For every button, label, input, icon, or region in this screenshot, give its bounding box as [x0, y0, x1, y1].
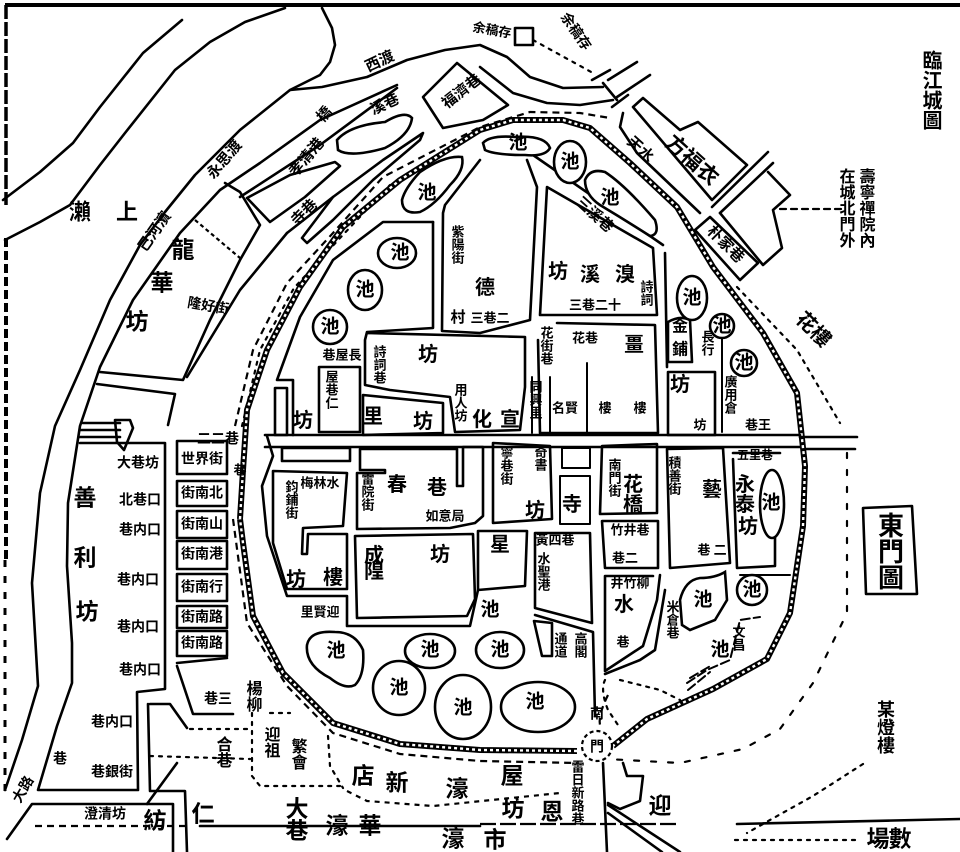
southwest labels: 合巷 — [214, 735, 232, 768]
inner street blocks, south — [262, 436, 790, 728]
inner ward labels — [286, 259, 758, 616]
inner ward labels: 寺 — [562, 493, 582, 516]
Shanli ward label: 坊 — [76, 600, 98, 624]
Shanli ward label: 利 — [74, 546, 96, 570]
pond labels: 池 — [682, 286, 702, 308]
west river label: 上 — [116, 200, 138, 224]
title: city map: 臨江城圖 — [919, 50, 942, 130]
inner ward labels: 坊 — [525, 498, 545, 522]
small street names, south: 鈞鋪街 — [284, 479, 298, 519]
pond: long east — [760, 470, 784, 538]
bottom street labels: 濠 — [446, 776, 468, 802]
rotated labels on the north canals: 隆好街 — [186, 294, 230, 318]
pond: east 1 — [677, 276, 707, 320]
west column street names: 世界街 — [181, 450, 223, 468]
west column street names: 巷内口 — [117, 618, 159, 636]
northeast labels: 天水 — [623, 133, 657, 166]
Longhua ward label: 華 — [150, 270, 174, 296]
inner ward labels: 畺 — [624, 334, 644, 356]
rotated labels on the north canals — [134, 9, 617, 318]
rotated labels on the north canals: 三溪巷 — [572, 193, 617, 236]
pond labels: 池 — [480, 598, 500, 620]
pond labels — [320, 132, 781, 718]
west column street names: 巷内口 — [91, 714, 133, 730]
inner ward labels: 水 — [614, 593, 634, 616]
inner ward labels: 樓 — [323, 566, 343, 589]
Longhua ward block — [97, 183, 287, 425]
west column street names: 大路 — [9, 773, 37, 806]
small street names, north: 樓 — [633, 400, 647, 416]
northwest canal strips — [247, 133, 423, 243]
west column street names: 二二巷 — [197, 432, 239, 448]
city wall — [240, 120, 805, 751]
west column street names: 北巷口 — [119, 492, 161, 508]
bottom street labels: 濠 — [326, 814, 348, 838]
north diamond block — [423, 63, 508, 128]
inner ward labels: 星 — [490, 534, 510, 556]
inner ward labels: 坊 — [548, 259, 568, 283]
west column street names: 巷三 — [204, 692, 232, 708]
small street names, south: 井竹柳 — [610, 576, 650, 590]
pond labels: 池 — [417, 182, 437, 204]
Longhua ward label — [126, 238, 194, 334]
west column street names: 巷 — [53, 752, 67, 768]
inner ward labels: 坊 — [293, 408, 313, 432]
small street names, south: 巷 二 — [697, 542, 727, 558]
northeast gate road and bridge — [592, 62, 790, 280]
small street names, north: 三巷二 — [470, 310, 510, 326]
pond labels: 池 — [525, 690, 545, 712]
small street names, south: 水聖港 — [536, 551, 550, 591]
bottom street labels: 恩 — [540, 800, 564, 824]
Longhua ward label: 坊 — [126, 310, 148, 334]
pond: north — [483, 137, 550, 155]
pond: southeast circle — [737, 575, 767, 605]
inner ward labels: 溪 — [580, 263, 600, 286]
pond labels: 池 — [355, 278, 375, 300]
west column street names: 巷内口 — [119, 522, 161, 538]
rotated labels on the north canals: 寺巷 — [288, 196, 321, 229]
southwest labels: 南 — [590, 706, 604, 722]
west column street names: 巷内口 — [119, 662, 161, 678]
northeast labels: 在城北門外 — [836, 167, 856, 248]
bottom street labels — [144, 764, 912, 852]
pond: south 6 — [501, 682, 575, 732]
small street names, north: 花巷 — [572, 330, 598, 346]
north gate box — [515, 28, 533, 45]
small street names, north: 廣用倉 — [722, 374, 738, 415]
southwest labels: 迎祖 — [262, 726, 280, 759]
small street names, south: 里賢迎 — [300, 604, 340, 620]
inner ward labels: 里 — [363, 406, 383, 428]
inner street blocks, north — [275, 155, 722, 435]
small street names, south: 寧巷街 — [498, 445, 514, 485]
pond: southeast irregular — [680, 572, 727, 630]
small street names, north: 長行 — [700, 330, 714, 357]
pond labels: 池 — [560, 150, 580, 172]
northeast labels: 花樓 — [791, 307, 836, 352]
pond: south 5 — [476, 632, 524, 668]
bottom street labels: 店 — [352, 764, 374, 788]
rotated labels on the north canals: 余稿存 — [471, 19, 513, 41]
inner ward labels: 永 — [735, 473, 755, 496]
pond: south 1 — [307, 632, 363, 686]
pond: wall-side — [402, 157, 462, 212]
pond labels: 池 — [600, 186, 620, 208]
small street names, south: 黃四巷 — [535, 532, 575, 548]
bottom street labels: 華 — [358, 814, 382, 838]
pond labels: 池 — [390, 242, 410, 264]
rotated labels on the north canals: 孝清港 — [285, 134, 328, 180]
small street names, north: 巷屋長 — [322, 348, 362, 362]
small street names, south: 積善街 — [666, 455, 682, 495]
inner ward labels: 春 — [387, 473, 407, 496]
west column street names: 街南山 — [181, 516, 223, 532]
inner ward labels: 德 — [475, 276, 495, 299]
inner ward labels: 巷 — [427, 476, 447, 499]
bottom street labels: 仁 — [192, 802, 214, 826]
rotated labels on the north canals: 永思渡 — [203, 136, 246, 182]
main east-west street — [265, 435, 857, 449]
west column street names: 街南北 — [181, 484, 223, 502]
bottom street labels: 巷 — [286, 818, 308, 844]
ponds — [307, 115, 784, 739]
pond labels: 池 — [508, 132, 528, 154]
west column street names: 街南港 — [181, 546, 223, 562]
northeast labels — [623, 130, 895, 754]
inner ward labels: 宣 — [500, 408, 520, 431]
inner ward labels: 溴 — [615, 263, 635, 286]
pond: south 3 — [373, 661, 425, 715]
rotated labels on the north canals: 己河濱 — [134, 208, 174, 255]
inner ward labels: 鋪 — [672, 340, 688, 358]
inner ward labels: 化 — [472, 408, 492, 431]
west river label: 瀨 — [69, 200, 91, 224]
pond labels: 池 — [490, 638, 510, 660]
small street names, south: 米倉巷 — [664, 599, 680, 639]
west street stack of small blocks — [177, 441, 233, 714]
pond labels: 池 — [742, 578, 762, 600]
bottom street labels: 新 — [386, 770, 408, 796]
small street names, south: 竹井巷 — [610, 522, 650, 538]
inner ward labels: 泰 — [735, 493, 755, 516]
outer dashed moat roads — [233, 40, 863, 840]
bottom street labels: 場 — [866, 826, 890, 852]
inner ward labels: 隍 — [364, 560, 384, 583]
small street names, south — [284, 444, 773, 659]
rotated labels on the north canals: 西渡 — [362, 47, 397, 76]
pond labels: 池 — [453, 696, 473, 718]
northeast labels: 壽寧禪院內 — [856, 168, 876, 248]
Longhua ward label: 龍 — [172, 238, 194, 262]
small street names, north: 坊 — [693, 418, 707, 432]
pond labels: 池 — [693, 588, 713, 610]
East Gate map box — [863, 506, 917, 594]
bottom street labels: 大 — [286, 796, 308, 822]
bottom street labels: 濠 — [442, 826, 464, 852]
pond: northwest block 2 — [348, 270, 382, 310]
bottom street labels: 屋 — [500, 764, 524, 788]
rotated labels on the north canals: 溪巷 — [367, 90, 402, 119]
south gate and roads — [582, 695, 680, 852]
bottom street labels: 紡 — [144, 808, 166, 834]
pond labels: 池 — [712, 314, 732, 336]
west bridge and gate — [80, 420, 133, 450]
southwest labels: 澄清坊 — [84, 806, 126, 822]
pond labels: 池 — [320, 316, 340, 338]
southwest labels — [84, 680, 604, 825]
inner ward labels: 村 — [450, 308, 466, 326]
pond: east 3 — [731, 350, 757, 376]
pond labels: 池 — [389, 676, 409, 698]
small street names, south: 如意局 — [425, 508, 465, 524]
pond labels: 池 — [420, 638, 440, 660]
inner ward labels: 金 — [672, 316, 688, 336]
small street names, south: 奇書 — [532, 444, 548, 472]
inner ward labels: 藝 — [702, 478, 722, 501]
bottom street labels: 數 — [888, 826, 912, 852]
pond: northwest oblong — [337, 115, 412, 154]
northeast labels: 朴家巷 — [703, 222, 748, 267]
northeast labels: 某燈樓 — [875, 700, 895, 754]
Shanli ward label — [74, 486, 98, 624]
inner ward labels: 坊 — [738, 514, 758, 538]
pond labels: 池 — [710, 638, 730, 660]
small street names, north: 花街巷 — [538, 325, 554, 365]
bottom street labels: 坊 — [502, 796, 524, 822]
small street names, north: 詩詞 — [638, 279, 654, 306]
small street names, north: 紫陽街 — [450, 224, 464, 264]
west column street names: 大巷坊 — [117, 454, 159, 472]
small street names, north: 巷王 — [745, 418, 771, 432]
East Gate map box: 東門圖 — [874, 512, 904, 590]
small street names, north: 樓 — [598, 400, 612, 416]
small street names, south: 文昌 — [730, 624, 746, 652]
inner ward labels: 坊 — [670, 372, 690, 396]
river banks and outer roads — [3, 8, 613, 790]
west column street names: 街南行 — [181, 578, 223, 596]
small street names, south: 高閣 — [572, 631, 588, 658]
small street names, south: 巷二 — [612, 550, 638, 566]
rotated labels on the north canals: 余稿存 — [557, 9, 595, 54]
inner ward labels: 橋 — [623, 493, 643, 516]
small street names, south: 通道 — [552, 631, 568, 659]
small street names, north: 屋巷仁 — [324, 370, 338, 409]
northeast labels: 方福衣 — [661, 130, 723, 190]
small street names, south: 南門街 — [606, 458, 622, 497]
small street names, north — [322, 224, 771, 432]
west column street names: 巷 — [233, 462, 247, 478]
small street names, north: 用人坊 — [452, 383, 468, 423]
small street names, south: 雷院街 — [360, 472, 374, 511]
inner ward labels: 花 — [623, 473, 643, 496]
small street names, north: 三巷二十 — [569, 298, 621, 312]
Shanli ward label: 善 — [74, 486, 96, 510]
pond: north 2 — [554, 141, 586, 183]
pond: northwest block 3 — [313, 310, 347, 344]
bottom street labels: 市 — [484, 826, 506, 852]
small street names, north: 名賢 — [552, 400, 578, 416]
small street names, north: 詩詞巷 — [372, 344, 386, 384]
pond labels: 池 — [734, 352, 754, 374]
rotated labels on the north canals: 福濟巷 — [438, 70, 485, 112]
southwest labels: 楊柳 — [244, 680, 262, 712]
inner ward labels: 坊 — [286, 567, 306, 591]
small street names, north: 同興里 — [528, 380, 542, 419]
pond labels: 池 — [761, 492, 781, 514]
west river label — [69, 200, 138, 224]
west column street names: 巷内口 — [117, 572, 159, 588]
west column street names — [9, 432, 247, 806]
west column street names: 街南路 — [181, 608, 223, 626]
pond: south 2 — [405, 634, 455, 668]
small street names, south: 五里巷 — [737, 448, 773, 462]
inner ward labels: 坊 — [430, 542, 450, 566]
pond: east 2 — [710, 314, 734, 338]
pond: northwest block 1 — [378, 238, 416, 268]
small street names, south: 巷 — [616, 634, 630, 650]
southwest road network — [7, 704, 960, 852]
pond labels: 池 — [326, 640, 346, 662]
west column street names: 街南路 — [181, 634, 223, 652]
bottom street labels: 迎 — [648, 794, 672, 818]
inner ward labels: 坊 — [413, 409, 433, 433]
inner ward labels: 坊 — [418, 342, 438, 366]
pond: north 3 — [585, 171, 657, 236]
small street names, south: 梅林水 — [300, 476, 340, 490]
southwest labels: 繁會 — [288, 737, 308, 770]
rotated labels on the north canals: 橋 — [313, 103, 336, 126]
southwest labels: 雷日新路巷 — [570, 760, 584, 825]
southwest labels: 門 — [590, 740, 604, 756]
inner ward labels: 成 — [364, 543, 384, 567]
pond: south 4 — [435, 675, 491, 739]
west column street names: 巷銀街 — [91, 764, 133, 780]
